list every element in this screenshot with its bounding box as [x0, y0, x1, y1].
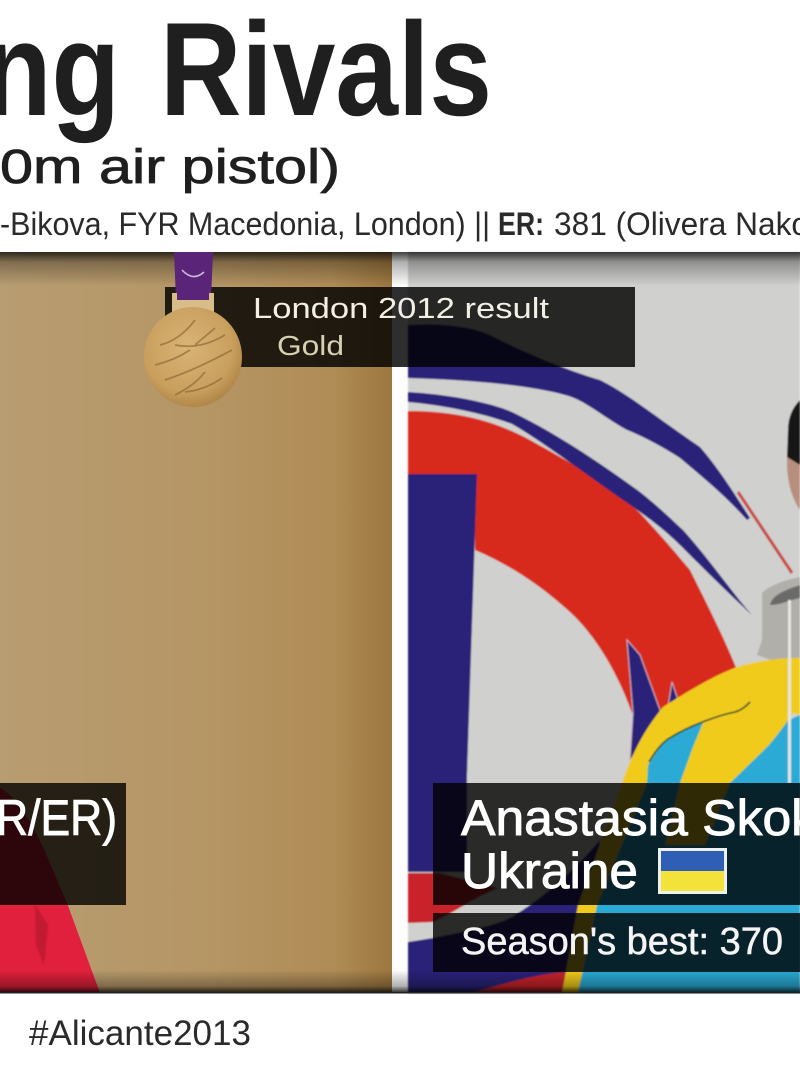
backdrop: blue thin brush stroke [408, 392, 752, 615]
result label: London 2012 result [253, 293, 549, 325]
panel: left athlete photo [0, 252, 392, 993]
backdrop: thin red line [738, 492, 792, 573]
athlete name: Anastasia Skok [461, 790, 800, 846]
backdrop: bottom red patch [472, 972, 565, 993]
divider strip [392, 252, 408, 993]
backdrop: blue block [408, 474, 477, 872]
records line [0, 206, 800, 242]
title: Rivals [160, 0, 492, 144]
backdrop: lower navy sweep [408, 840, 600, 993]
result callout box [165, 287, 635, 367]
title [0, 0, 492, 144]
backdrop: lower red band [408, 873, 498, 923]
athlete jacket [0, 788, 100, 993]
athlete country: Ukraine [461, 843, 638, 899]
hashtag: #Alicante2013 [29, 1014, 251, 1053]
athlete jacket [562, 600, 800, 993]
icon: Ukraine flag [658, 848, 727, 894]
photo top and bottom shading [0, 252, 800, 994]
records line: ER: [498, 206, 544, 242]
athlete face edge [787, 457, 800, 510]
records line: -Bikova, FYR Macedonia, London) || [0, 206, 490, 242]
backdrop: blue upper brush stroke [408, 324, 750, 520]
subtitle: 0m air pistol) [0, 141, 340, 194]
athlete name fragment: R/ER) [0, 790, 117, 846]
icon: gold medal [144, 252, 242, 407]
panel: right athlete photo [408, 252, 800, 993]
backdrop: blue spike [627, 640, 678, 760]
panel: right name plate [433, 783, 800, 905]
backdrop: red arc [408, 411, 737, 720]
result value: Gold [277, 330, 344, 361]
panel: season best plate [433, 913, 800, 972]
panel: left name plate [0, 783, 126, 905]
season best text: Season's best: 370 [461, 921, 783, 963]
athlete hood [757, 577, 800, 665]
athlete hair [787, 400, 800, 470]
